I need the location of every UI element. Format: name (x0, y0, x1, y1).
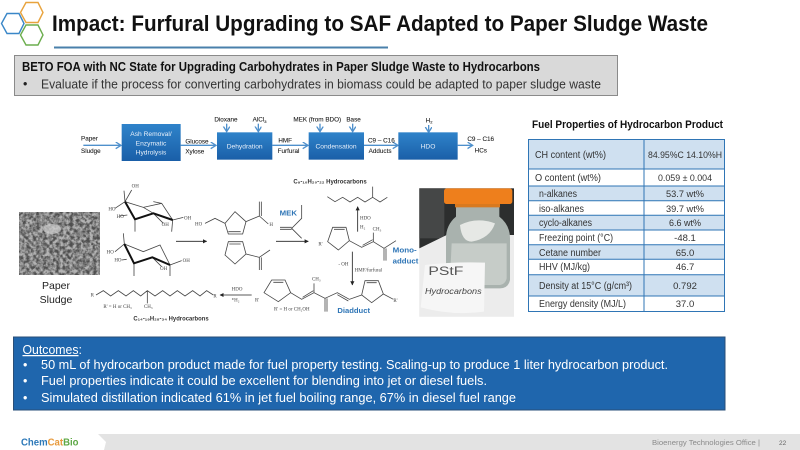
table: fuel properties: 37.0 (676, 299, 694, 310)
panel: outcomes: • (23, 391, 27, 405)
table: fuel properties: cyclo-alkanes (539, 218, 592, 229)
process flow diagram: 3 (264, 119, 267, 124)
process flow diagram: Furfural (278, 148, 299, 155)
process flow diagram: HDO (421, 144, 435, 151)
mono-adduct structure: CH₃ (373, 228, 382, 233)
panel: outcomes: 50 mL of hydrocarbon product made for fuel property testing. Scaling-up to produce 1 liter hydrocarbon product. (41, 358, 668, 372)
arrow: down to diadduct: HMF/furfural (355, 268, 383, 273)
panel: outcomes (14, 337, 725, 410)
table: fuel properties: 65.0 (676, 248, 694, 259)
glucose structure: HO (117, 215, 124, 220)
panel: outcomes: Outcomes (22, 343, 78, 357)
table: fuel properties: -48.1 (674, 233, 696, 244)
panel: outcomes: • (23, 358, 27, 372)
glucose structure: OH (184, 216, 192, 221)
panel: project summary: • (23, 77, 27, 91)
process flow diagram: Ash Removal/ (130, 131, 172, 138)
panel: outcomes: • (23, 374, 27, 388)
xylose structure (107, 233, 190, 276)
process flow diagram: Glucose (185, 139, 209, 146)
process flow diagram: Condensation (315, 144, 357, 151)
process flow diagram: Base (346, 117, 361, 124)
logo: hexagons (2, 2, 43, 45)
label: diadduct: Diadduct (337, 306, 370, 315)
table: fuel properties: 0.792 (673, 281, 697, 292)
panel: project summary: Evaluate if the process for converting carbohydrates in biomass could be adapted to paper sludge waste (41, 78, 601, 92)
label: adduct: adduct (393, 257, 419, 266)
branched alkane (327, 187, 387, 202)
diadduct structure: CH₃ (312, 278, 321, 283)
table: fuel properties: n-alkanes (539, 189, 577, 200)
table: fuel properties: 46.7 (676, 262, 694, 273)
process flow diagram: HCs (475, 147, 487, 154)
xylose structure: OH (183, 259, 190, 264)
HMF structure: HO (195, 222, 203, 227)
arrow: HDO up: HDO (360, 216, 371, 221)
photo: hydrocarbon bottle: Hydrocarbons (425, 286, 482, 296)
xylose structure: OH (160, 267, 168, 272)
label: MEK: MEK (280, 208, 297, 217)
xylose structure: HO (114, 258, 122, 263)
diadduct structure: R' (255, 299, 259, 304)
photo: paper sludge (19, 212, 100, 275)
table: fuel properties: 53.7 wt% (666, 189, 705, 200)
arrow: down to diadduct (338, 252, 383, 285)
footer bar (98, 434, 800, 450)
process flow diagram: H (426, 117, 430, 124)
title: Impact: Furfural Upgrading to SAF Adapted to Paper Sludge Waste (52, 11, 708, 36)
glucose structure (108, 184, 192, 232)
process flow diagram: C9 – C16 (368, 138, 395, 145)
arrow: HDO up: H₂ (360, 226, 366, 231)
HMF structure (195, 202, 273, 234)
long-chain hydrocarbon: CH₃ (144, 305, 153, 310)
diadduct structure (255, 278, 398, 313)
process flow diagram: Hydrolysis (136, 150, 167, 157)
process flow diagram: Enzymatic (136, 140, 167, 147)
table: fuel properties: Cetane number (539, 248, 602, 259)
process flow diagram: 2 (430, 120, 433, 125)
page number: 22 (779, 440, 787, 447)
process flow diagram: MEK (from BDO) (293, 117, 341, 124)
process flow diagram (81, 117, 495, 161)
process flow diagram: Paper (81, 135, 98, 142)
diadduct structure: R' (393, 299, 398, 304)
table: fuel properties: 39.7 wt% (666, 204, 705, 215)
arrow: HDO: HDO (232, 288, 243, 293)
table: fuel properties: 0.059 ± 0.004 (658, 173, 712, 184)
process flow diagram: Sludge (81, 148, 101, 155)
label: paper sludge: Paper (42, 280, 71, 292)
process flow diagram: Adducts (369, 148, 392, 155)
MEK structure (280, 205, 302, 238)
mono-adduct structure: R' (318, 242, 323, 247)
mono-adduct structure (318, 227, 396, 261)
HMF structure: H (269, 223, 273, 228)
table: fuel properties: 84.95%C 14.10%H (648, 150, 722, 161)
arrow: HDO: *H₂ (232, 298, 240, 303)
table: fuel properties: CH content (wt%) (535, 150, 606, 161)
label: C14-18 hydrocarbons: C₁₄-₁₉H₂₈-₃₄ Hydrocarbons (133, 316, 209, 322)
table: fuel properties: iso-alkanes (539, 204, 584, 215)
panel: outcomes: : (78, 343, 82, 357)
arrow: HDO up (358, 207, 371, 232)
panel: project summary: BETO FOA with NC State for Upgrading Carbohydrates in Paper Sludge Waste to Hydrocarbons (22, 60, 540, 74)
reaction scheme: right (255, 180, 419, 315)
glucose structure: HO (108, 208, 116, 213)
label: C9-10 hydrocarbons: C₉-₁₀H₂₀-₂₂ Hydrocarbons (293, 180, 367, 186)
process flow diagram: Dioxane (214, 117, 238, 124)
process flow diagram: Dehydration (227, 144, 263, 151)
arrow: condensation (276, 240, 308, 243)
arrow: HDO (220, 288, 252, 303)
arrow: sugars to furans (176, 240, 207, 243)
process flow diagram: HMF (278, 138, 292, 145)
table: fuel properties: Freezing point (°C) (539, 233, 613, 244)
xylose structure: HO (107, 250, 114, 255)
table: fuel properties: Density at 15°C (g/cm³) (539, 281, 632, 292)
long-chain hydrocarbon: R (213, 294, 217, 299)
panel: outcomes: Simulated distillation indicated 61% in jet fuel boiling range, 67% in diesel fuel range (41, 391, 516, 405)
glucose structure: OH (132, 184, 139, 189)
long-chain hydrocarbon: R' = H or CH₃ (103, 305, 132, 310)
glucose structure: OH (162, 223, 169, 228)
arrow: down to diadduct: - OH (338, 263, 349, 268)
photo: hydrocarbon bottle (419, 188, 514, 317)
furfural structure (225, 242, 270, 270)
panel: outcomes: Fuel properties indicate it could be excellent for blending into jet or diesel fuels. (41, 374, 487, 388)
long-chain hydrocarbon: R (91, 294, 95, 299)
process flow diagram: AlCl (253, 117, 264, 124)
table: fuel properties: HHV (MJ/kg) (539, 262, 590, 273)
table: fuel properties: Energy density (MJ/L) (539, 299, 626, 310)
table heading: Fuel Properties of Hydrocarbon Product (532, 119, 723, 131)
photo: hydrocarbon bottle: PStF (428, 264, 463, 278)
process flow diagram: C9 – C16 (467, 136, 495, 143)
label: mono-adduct: Mono- (393, 245, 417, 254)
process flow diagram: Xylose (185, 149, 205, 156)
label: paper sludge: Sludge (40, 294, 73, 306)
table: fuel properties (528, 140, 724, 312)
footer logo: ChemCatBio: ChemCatBio (21, 436, 78, 448)
reaction scheme: left (91, 184, 308, 322)
footer office name: Bioenergy Technologies Office | (652, 440, 760, 447)
panel: project summary (14, 56, 618, 96)
diadduct structure: R' = H or CH₂OH (274, 308, 310, 313)
title underline (54, 46, 388, 48)
table: fuel properties: 6.6 wt% (669, 218, 702, 229)
long-chain hydrocarbon (91, 291, 217, 310)
table: fuel properties: O content (wt%) (535, 173, 601, 184)
